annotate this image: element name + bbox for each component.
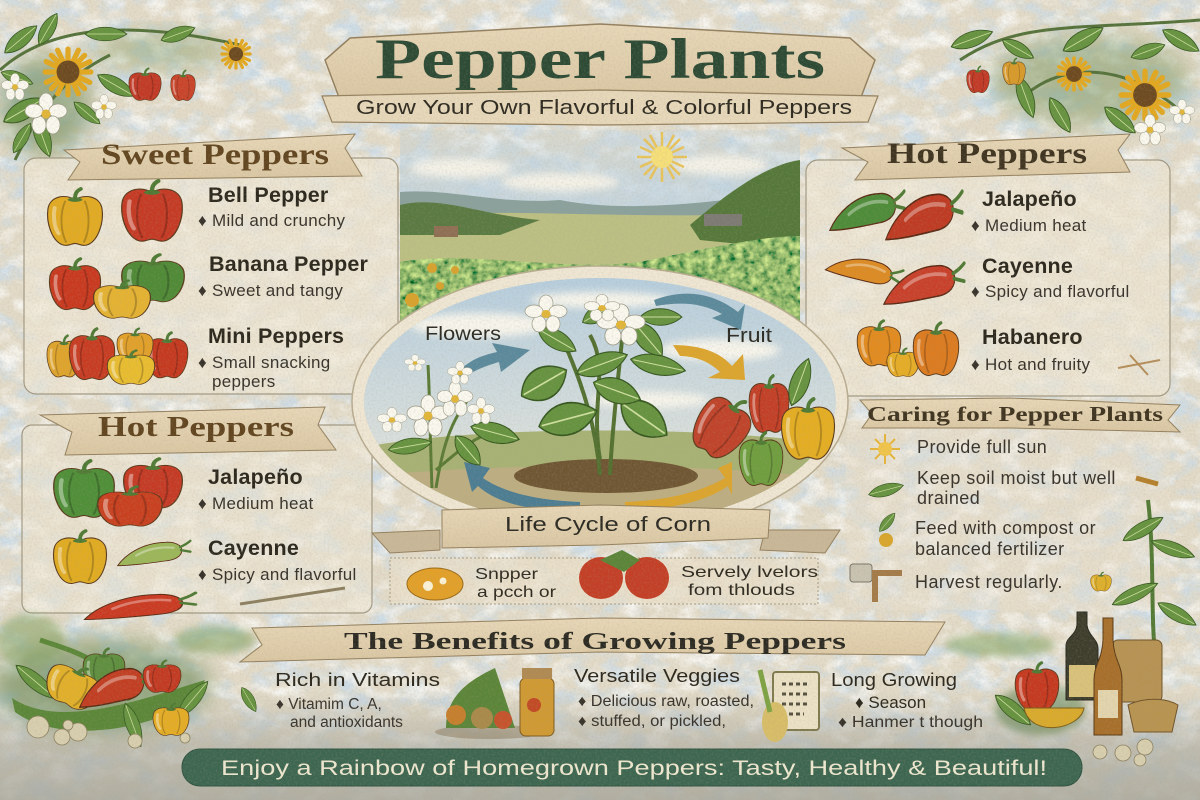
item: cayenne left: ♦ Spicy and flavorful: [198, 565, 357, 584]
benefit: rich in vitamins: ♦ Vitamim C, A,: [276, 696, 382, 713]
subtitle ribbon: Grow Your Own Flavorful & Colorful Peppers: [356, 97, 852, 119]
item: cayenne right: ♦ Spicy and flavorful: [971, 282, 1130, 301]
panel: hot peppers right: [806, 134, 1170, 396]
life cycle oval: [352, 266, 848, 538]
item: jalapeno left: [54, 459, 314, 526]
heading: sweet peppers ribbon: Sweet Peppers: [101, 138, 329, 171]
item: cayenne right: Cayenne: [982, 254, 1073, 278]
item: jalapeno right: Jalapeño: [982, 187, 1077, 211]
illustration: ripe peppers: [683, 355, 834, 486]
decoration: top-right floral corner: [949, 20, 1200, 145]
illustration: jar and vegetables: [435, 668, 554, 739]
item: banana pepper: [49, 252, 369, 318]
illustration: bottom-right bottles and pepper: [945, 500, 1199, 766]
landscape scene: [400, 130, 800, 332]
arrow: top blue: [654, 294, 745, 330]
illustration: calendar: [760, 670, 819, 742]
decoration: top-left floral corner: [0, 10, 250, 160]
item: mini peppers: peppers: [212, 372, 276, 391]
heading: hot peppers right ribbon: [842, 134, 1130, 180]
life cycle ribbon: Life Cycle of Corn: [505, 514, 711, 536]
item: mini peppers: ♦ Small snacking: [198, 353, 331, 372]
item: banana pepper: ♦ Sweet and tangy: [198, 281, 343, 300]
panel: caring for pepper plants: Feed with compost or: [915, 518, 1096, 538]
item: bell pepper: ♦ Mild and crunchy: [198, 211, 346, 230]
benefit: versatile veggies: ♦ stuffed, or pickled,: [578, 713, 726, 730]
icon: compost: [876, 510, 898, 547]
item: cayenne right: [825, 243, 1130, 304]
heading: caring ribbon: [860, 398, 1180, 432]
icon: water leaf: [867, 478, 1158, 500]
item: mini peppers: [47, 324, 344, 391]
life cycle notes strip: a pcch or: [477, 584, 557, 601]
item: jalapeno right: [830, 187, 1087, 240]
life cycle notes strip: Servely lvelors: [681, 564, 818, 581]
heading: hot peppers left ribbon: Hot Peppers: [98, 411, 294, 443]
item: cayenne left: Cayenne: [208, 536, 299, 560]
item: banana pepper: Banana Pepper: [209, 252, 369, 276]
item: habanero: ♦ Hot and fruity: [971, 355, 1091, 374]
item: cayenne left: [54, 531, 357, 620]
benefit: rich in vitamins: and antioxidants: [290, 714, 403, 731]
icon: sun: [637, 132, 687, 182]
item: jalapeno left: Jalapeño: [208, 465, 303, 489]
panel: sweet peppers: [24, 134, 398, 394]
illustration: central plant: [514, 294, 687, 475]
life cycle notes strip: [390, 550, 818, 604]
item: jalapeno right: ♦ Medium heat: [971, 216, 1087, 235]
heading: hot peppers right ribbon: Hot Peppers: [887, 137, 1087, 170]
panel: caring for pepper plants: [846, 398, 1180, 610]
subtitle ribbon: [322, 90, 878, 125]
benefit: versatile veggies: Versatile Veggies: [574, 666, 740, 686]
title banner: Pepper Plants: [375, 28, 825, 91]
item: bell pepper: [48, 181, 346, 245]
arrow: fruit back: [625, 462, 732, 510]
benefit: versatile veggies: ♦ Delicious raw, roasted,: [578, 693, 754, 710]
item: mini peppers: Mini Peppers: [208, 324, 344, 348]
title banner: [325, 24, 875, 100]
heading: sweet peppers ribbon: [64, 134, 362, 180]
life cycle notes strip: Snpper: [475, 566, 539, 583]
panel: caring for pepper plants: Provide full sun: [917, 437, 1047, 457]
item: habanero: Habanero: [982, 325, 1083, 349]
panel: caring for pepper plants: drained: [917, 488, 980, 508]
panel: hot peppers left: [22, 407, 372, 620]
icon: tomatoes: [579, 550, 669, 599]
heading: caring ribbon: Caring for Pepper Plants: [867, 402, 1163, 426]
illustration: bottom-left vegetable pile: [0, 614, 255, 749]
life cycle ribbon: [372, 505, 840, 553]
benefit: long growing season: ♦ Season: [855, 693, 926, 712]
panel: caring for pepper plants: Keep soil moist but well: [917, 468, 1116, 488]
benefits banner: The Benefits of Growing Peppers: [344, 629, 846, 655]
arrow: plant to fruit: [673, 345, 745, 380]
benefit: long growing season: [831, 670, 983, 731]
benefit: long growing season: Long Growing: [831, 670, 957, 690]
benefits banner: [240, 618, 945, 662]
closing banner: [182, 749, 1082, 786]
benefit: rich in vitamins: [237, 670, 440, 731]
item: bell pepper: Bell Pepper: [208, 183, 329, 207]
closing banner: Enjoy a Rainbow of Homegrown Peppers: Tasty, Healthy & Beautiful!: [221, 757, 1047, 780]
benefit: long growing season: ♦ Hanmer t though: [838, 714, 983, 731]
panel: caring for pepper plants: balanced fertilizer: [915, 539, 1065, 559]
item: jalapeno left: ♦ Medium heat: [198, 494, 314, 513]
label: flowers: Flowers: [425, 324, 501, 345]
arrow: flowers to plant: [458, 343, 530, 380]
benefit: rich in vitamins: Rich in Vitamins: [275, 670, 440, 690]
icon: harvest tool: [850, 564, 902, 602]
arrow: bottom blue: [464, 462, 580, 510]
label: fruit: Fruit: [726, 325, 773, 347]
icon: sun small: [870, 434, 900, 464]
item: habanero: [857, 321, 1160, 377]
benefit: versatile veggies: [574, 666, 754, 730]
life cycle notes strip: fom thlouds: [688, 582, 795, 599]
panel: caring for pepper plants: Harvest regularly.: [915, 572, 1063, 592]
icon: orange slice: [407, 568, 463, 600]
heading: hot peppers left ribbon: [40, 407, 336, 455]
illustration: flowering plant: [377, 355, 522, 488]
